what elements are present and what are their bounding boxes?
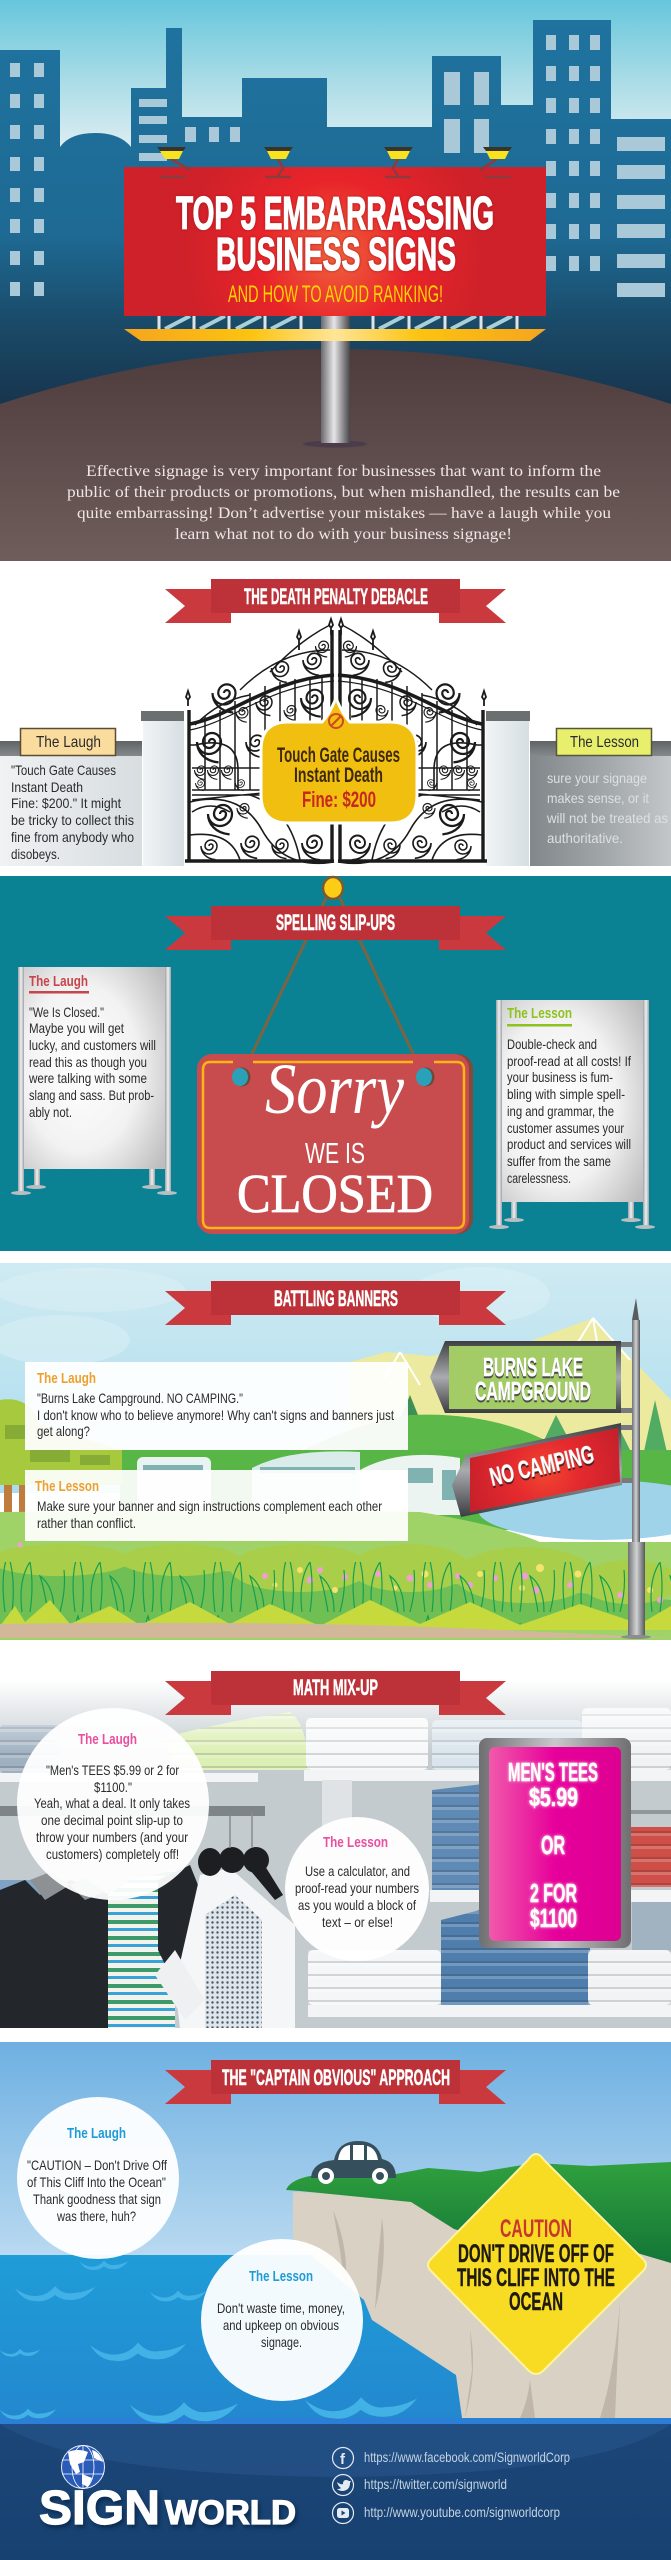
laugh panel: I don't know who to believe anymore! Why can't signs and banners just bbox=[37, 1407, 394, 1423]
intro text: public of their products or promotions, but when mishandled, the results can be bbox=[67, 484, 620, 501]
icon: car bbox=[311, 2141, 396, 2184]
teal background bbox=[0, 876, 671, 1251]
caution diamond sign bbox=[428, 2154, 646, 2374]
pink price sign: $5.99 bbox=[529, 1782, 578, 1812]
facebook link bbox=[332, 2448, 570, 2468]
closed sign: WE IS bbox=[305, 1138, 365, 1170]
subtitle: AND HOW TO AVOID RANKING! bbox=[228, 281, 443, 308]
lesson bubble: as you would a block of bbox=[298, 1897, 416, 1913]
wall right bbox=[530, 741, 671, 866]
laugh bubble: of This Cliff Into the Ocean" bbox=[27, 2174, 166, 2190]
wall left bbox=[0, 741, 142, 866]
laugh panel: get along? bbox=[37, 1423, 90, 1439]
store background bbox=[0, 1680, 671, 2028]
intro text: learn what not to do with your business signage! bbox=[175, 526, 512, 543]
laugh bubble: throw your numbers (and your bbox=[36, 1829, 188, 1845]
building windows bbox=[10, 35, 665, 297]
hanging rope bbox=[241, 896, 424, 1077]
lesson bubble: Don't waste time, money, bbox=[217, 2300, 345, 2316]
intro text: quite embarrassing! Don’t advertise your mistakes — have a laugh while you bbox=[77, 505, 611, 522]
lake bbox=[478, 1480, 671, 1540]
trees on the left bbox=[0, 1399, 122, 1514]
mountains bbox=[350, 1318, 671, 1490]
grass bbox=[0, 1562, 671, 1630]
heading banner: BATTLING BANNERS bbox=[274, 1286, 398, 1311]
ocean bbox=[0, 2255, 671, 2418]
lesson board: bling with simple spell- bbox=[507, 1086, 625, 1102]
closed sign: Sorry bbox=[265, 1049, 404, 1129]
pillars bbox=[141, 711, 530, 866]
laugh text: disobeys. bbox=[11, 846, 60, 862]
billboard struts bbox=[159, 316, 517, 329]
bushes bbox=[0, 1544, 671, 1604]
laugh bubble: Yeah, what a deal. It only takes bbox=[34, 1795, 190, 1811]
ground bbox=[0, 349, 671, 561]
heading banner: THE DEATH PENALTY DEBACLE bbox=[244, 584, 428, 609]
facebook link: f bbox=[340, 2451, 346, 2468]
laugh board: The Laugh bbox=[29, 973, 88, 990]
caution diamond sign: CAUTION bbox=[500, 2215, 572, 2243]
top fade bbox=[0, 1680, 671, 1755]
heading banner bbox=[165, 2060, 506, 2104]
footer bbox=[0, 2424, 671, 2560]
folded shirts on top shelves bbox=[0, 1708, 671, 1773]
heading banner: MATH MIX-UP bbox=[293, 1675, 378, 1700]
laugh bubble: The Laugh bbox=[78, 1731, 137, 1748]
billboard pole bbox=[303, 316, 367, 448]
twitter link: https://twitter.com/signworld bbox=[364, 2476, 507, 2492]
laugh text: Instant Death bbox=[11, 779, 83, 795]
city skyline bbox=[0, 20, 671, 420]
icon: nail bbox=[323, 877, 343, 899]
laugh board: ably not. bbox=[29, 1104, 72, 1120]
billboard board bbox=[124, 167, 546, 316]
pink price sign: OR bbox=[541, 1830, 565, 1860]
billboard lamps bbox=[157, 147, 512, 177]
iron gate bbox=[185, 619, 487, 863]
laugh bubble: "Men's TEES $5.99 or 2 for bbox=[46, 1762, 179, 1778]
hanging shirts bbox=[0, 1812, 295, 2028]
laugh text: be tricky to collect this bbox=[11, 812, 134, 828]
pink price sign: $1100 bbox=[530, 1903, 577, 1933]
cliff bbox=[293, 2192, 671, 2418]
lesson board: The Lesson bbox=[507, 1005, 572, 1022]
dirt path bbox=[0, 1623, 671, 1638]
panel: the death penalty debacle bbox=[0, 579, 671, 866]
gate warning sign: Touch Gate Causes bbox=[277, 744, 400, 767]
sky bbox=[0, 1263, 671, 1493]
laugh bubble: $1100." bbox=[94, 1779, 132, 1795]
pink price sign: 2 FOR bbox=[530, 1878, 577, 1908]
gate warning sign bbox=[261, 698, 417, 823]
lesson panel: The Lesson bbox=[35, 1478, 99, 1495]
lesson panel bbox=[25, 1470, 408, 1541]
sky bbox=[0, 2042, 671, 2255]
lesson bubble: and upkeep on obvious bbox=[223, 2317, 339, 2333]
laugh bubble: The Laugh bbox=[67, 2125, 126, 2142]
logo wordmark: SIGN bbox=[39, 2482, 160, 2535]
lesson tag: The Lesson bbox=[570, 734, 639, 751]
waves bbox=[0, 2261, 417, 2423]
pink price sign bbox=[479, 1738, 631, 1948]
laugh board: read this as though you bbox=[29, 1054, 147, 1070]
lesson bubble bbox=[285, 1817, 429, 1961]
flowers bbox=[18, 1542, 663, 1603]
intro text bbox=[67, 463, 620, 543]
icon: prohibition bbox=[329, 714, 343, 728]
laugh board: Maybe you will get bbox=[29, 1020, 124, 1036]
lesson board: Double-check and bbox=[507, 1036, 597, 1052]
lesson board: ing and grammar, the bbox=[507, 1103, 614, 1119]
jeans stacks bbox=[432, 1782, 671, 2005]
laugh bubble bbox=[17, 2097, 179, 2259]
laugh text bbox=[11, 762, 134, 862]
footer light arc bbox=[0, 2424, 671, 2477]
lesson text: sure your signage bbox=[547, 770, 647, 786]
meadow bbox=[0, 1511, 671, 1640]
lesson text: makes sense, or it bbox=[547, 790, 649, 806]
lesson board: product and services will bbox=[507, 1136, 631, 1152]
lesson bubble: proof-read your numbers bbox=[295, 1880, 419, 1896]
lesson board: carelessness. bbox=[507, 1170, 571, 1186]
youtube link: http://www.youtube.com/signworldcorp bbox=[364, 2504, 560, 2520]
red no camping sign bbox=[452, 1423, 622, 1517]
black hangers bbox=[198, 1847, 283, 1900]
heading banner bbox=[165, 906, 506, 950]
signpost bbox=[621, 1298, 651, 1639]
caution diamond sign: OCEAN bbox=[509, 2288, 563, 2316]
shelves bbox=[0, 1770, 671, 2017]
logo wordmark bbox=[39, 2482, 296, 2535]
gate warning sign: Instant Death bbox=[294, 764, 383, 787]
laugh bubble bbox=[17, 1708, 209, 1900]
laugh board bbox=[11, 967, 177, 1195]
heading banner: SPELLING SLIP-UPS bbox=[276, 910, 395, 935]
clouds bbox=[0, 1267, 550, 1365]
laugh tag bbox=[20, 728, 116, 756]
sign holes bbox=[232, 1068, 434, 1086]
laugh board: "We Is Closed." bbox=[29, 1004, 104, 1020]
laugh tag: The Laugh bbox=[36, 734, 101, 751]
lesson board: customer assumes your bbox=[507, 1120, 624, 1136]
laugh bubble: one decimal point slip-up to bbox=[41, 1812, 183, 1828]
lesson panel: rather than conflict. bbox=[37, 1515, 136, 1531]
heading banner bbox=[165, 1281, 506, 1325]
laugh board: were talking with some bbox=[28, 1070, 147, 1086]
caravans bbox=[137, 1451, 460, 1515]
laugh board: lucky, and customers will bbox=[29, 1037, 156, 1053]
lesson text bbox=[546, 770, 668, 846]
icon: globe bbox=[62, 2446, 104, 2488]
heading banner bbox=[165, 1671, 506, 1715]
trees on the right bbox=[400, 1395, 671, 1470]
green hill bbox=[270, 1415, 671, 1510]
hero section: skyline and billboard bbox=[0, 0, 671, 561]
laugh board: slang and sass. But prob- bbox=[29, 1087, 154, 1103]
lesson board: suffer from the same bbox=[507, 1153, 611, 1169]
facebook link: https://www.facebook.com/SignworldCorp bbox=[364, 2449, 570, 2465]
panel: battling banners bbox=[0, 1263, 671, 1640]
green campground sign bbox=[430, 1341, 621, 1413]
lesson board: proof-read at all costs! If bbox=[507, 1053, 631, 1069]
billboard tray bbox=[124, 329, 546, 341]
closed sign bbox=[197, 1049, 473, 1234]
lesson bubble: signage. bbox=[261, 2334, 302, 2350]
pink price sign: MEN'S TEES bbox=[508, 1757, 598, 1787]
lesson board: your business is fum- bbox=[507, 1069, 613, 1085]
gate warning sign: Fine: $200 bbox=[302, 787, 376, 812]
green campground sign: BURNS LAKE bbox=[483, 1352, 583, 1382]
lesson text: authoritative. bbox=[547, 830, 623, 846]
closed sign: CLOSED bbox=[237, 1163, 433, 1224]
red no camping sign: NO CAMPING bbox=[487, 1441, 597, 1492]
lesson bubble: The Lesson bbox=[249, 2268, 313, 2285]
laugh text: "Touch Gate Causes bbox=[11, 762, 116, 778]
heading banner bbox=[165, 579, 506, 623]
laugh panel bbox=[25, 1362, 408, 1450]
sky bbox=[0, 0, 671, 170]
laugh text: Fine: $200." It might bbox=[11, 795, 121, 811]
hanging rail bbox=[0, 1806, 265, 1816]
youtube link bbox=[332, 2502, 560, 2524]
lesson tag bbox=[556, 728, 652, 756]
twitter link bbox=[332, 2474, 507, 2496]
laugh bubble: was there, huh? bbox=[56, 2208, 136, 2224]
logo wordmark: WORLD bbox=[165, 2494, 296, 2532]
lesson panel: Make sure your banner and sign instructions complement each other bbox=[37, 1498, 382, 1514]
lesson bubble bbox=[201, 2239, 363, 2401]
laugh bubble: customers) completely off! bbox=[46, 1846, 179, 1862]
laugh bubble: Thank goodness that sign bbox=[33, 2191, 161, 2207]
laugh text: fine from anybody who bbox=[11, 829, 134, 845]
intro text: Effective signage is very important for businesses that want to inform the bbox=[86, 463, 601, 480]
title bbox=[176, 187, 494, 280]
lesson bubble: Use a calculator, and bbox=[305, 1863, 410, 1879]
lesson bubble: text – or else! bbox=[322, 1914, 393, 1930]
cliff grass bbox=[286, 2162, 671, 2263]
green campground sign: CAMPGROUND bbox=[475, 1376, 591, 1406]
heading banner: THE "CAPTAIN OBVIOUS" APPROACH bbox=[222, 2065, 450, 2090]
sign border bbox=[203, 1062, 464, 1228]
panel: spelling slip-ups bbox=[0, 876, 671, 1251]
laugh bubble: "CAUTION – Don't Drive Off bbox=[27, 2157, 167, 2173]
lesson board bbox=[489, 1000, 655, 1229]
laugh panel: The Laugh bbox=[37, 1370, 96, 1387]
lesson bubble: The Lesson bbox=[323, 1834, 388, 1851]
panel: the captain obvious approach bbox=[0, 2042, 671, 2424]
title: BUSINESS SIGNS bbox=[216, 228, 456, 280]
white stacks bottom bbox=[308, 1950, 671, 2005]
laugh panel: "Burns Lake Campground. NO CAMPING." bbox=[37, 1390, 243, 1406]
panel: math mix-up bbox=[0, 1671, 671, 2028]
